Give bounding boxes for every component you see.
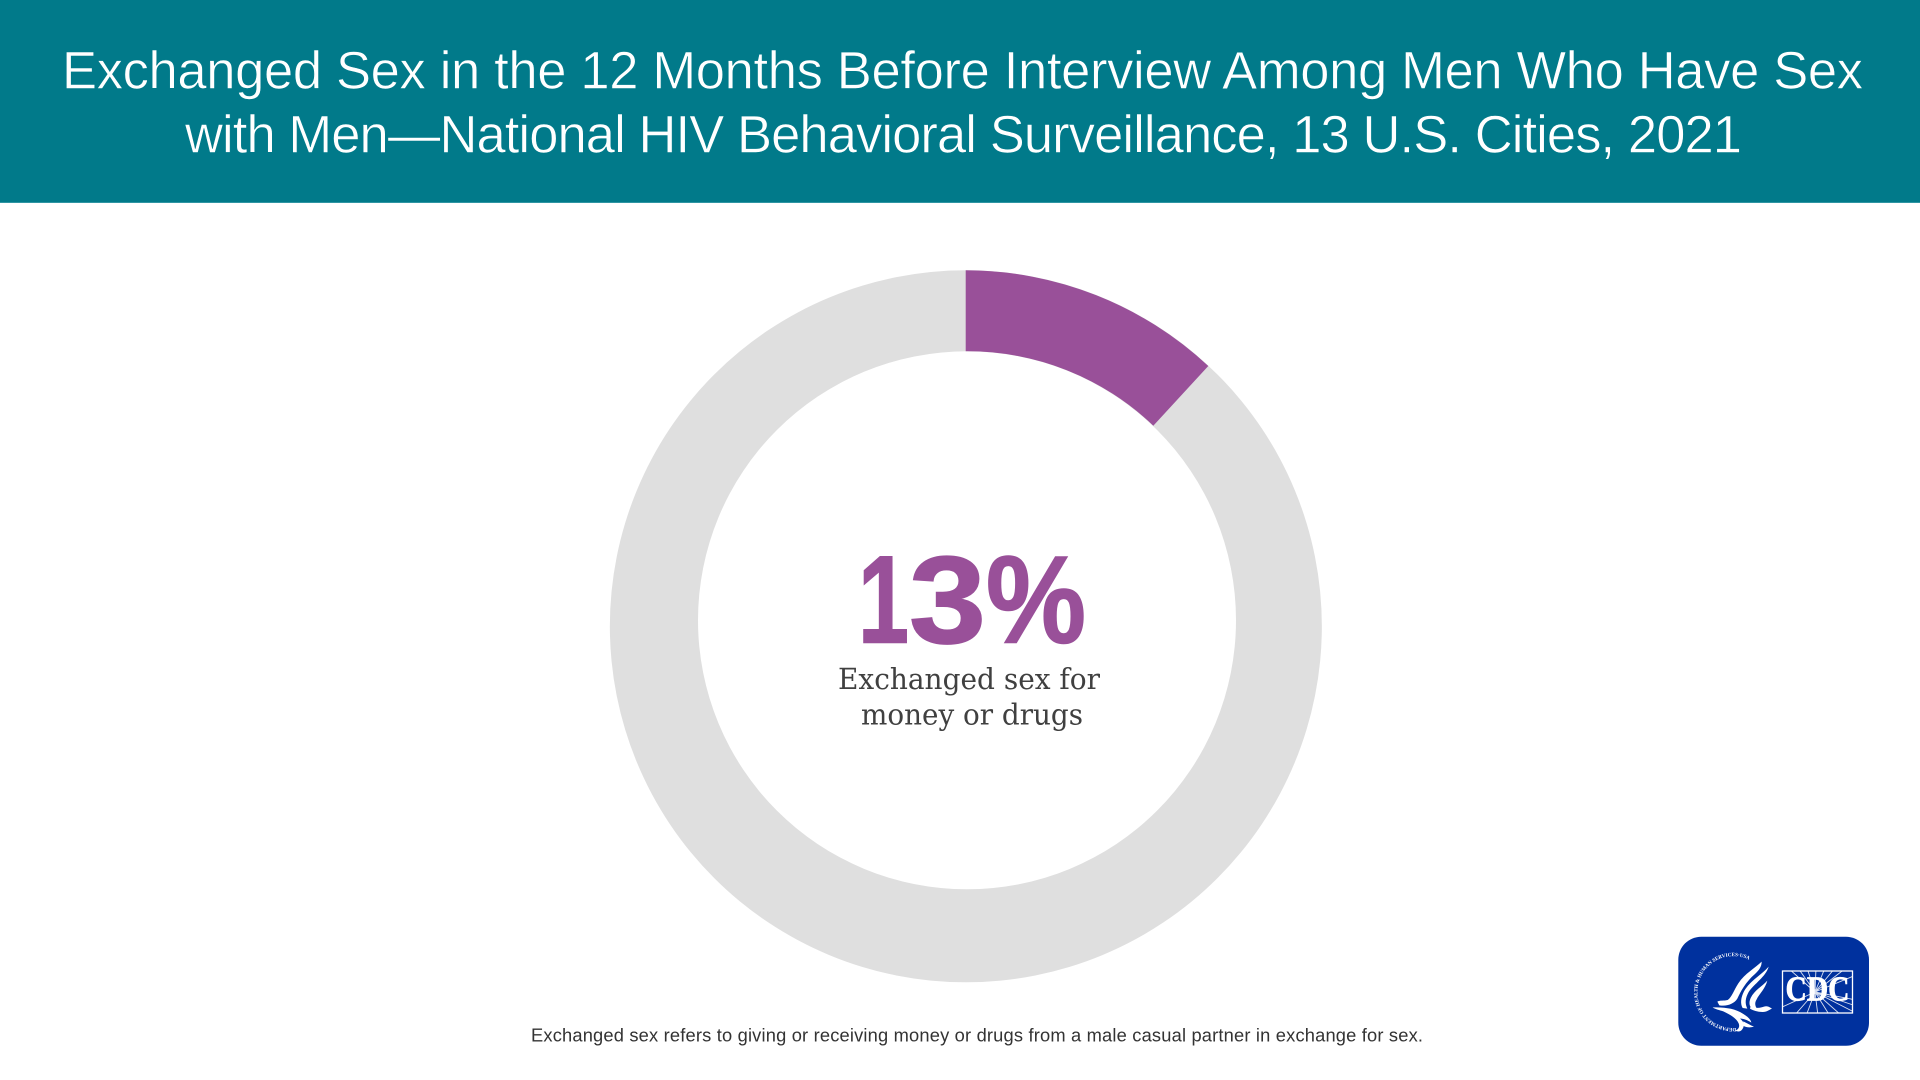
logo: HHS and CDC badge — [1678, 936, 1869, 1046]
center value: 13% — [858, 532, 1086, 670]
title: Exchanged Sex in the 12 Months Before Interview Among Men Who Have Sex — [62, 42, 1863, 100]
center label — [838, 663, 1100, 732]
icon: CDC box — [1782, 970, 1854, 1014]
donut chart — [610, 270, 1322, 982]
footnote: Exchanged sex refers to giving or receiving money or drugs from a male casual partner in exchange for sex. — [531, 1024, 1423, 1046]
title — [62, 42, 1863, 164]
center value: 13%: 1 — [858, 532, 909, 670]
donut: purple 13% segment — [966, 270, 1208, 426]
center label: money or drugs — [861, 698, 1083, 732]
icon: HHS eagle — [1713, 962, 1772, 1031]
center label: Exchanged sex for — [838, 663, 1100, 696]
title: with Men—National HIV Behavioral Surveillance, 13 U.S. Cities, 2021 — [184, 106, 1742, 164]
donut: grey ring — [610, 270, 1322, 982]
center value: 13%: % — [986, 532, 1086, 670]
icon: HHS seal ring text: DEPARTMENT OF HEALTH & HUMAN SERVICES·USA — [1694, 952, 1750, 1032]
center value: 13%: 3 — [909, 532, 986, 670]
CDC wordmark: CDC — [1786, 970, 1850, 1008]
header banner — [0, 0, 1920, 203]
